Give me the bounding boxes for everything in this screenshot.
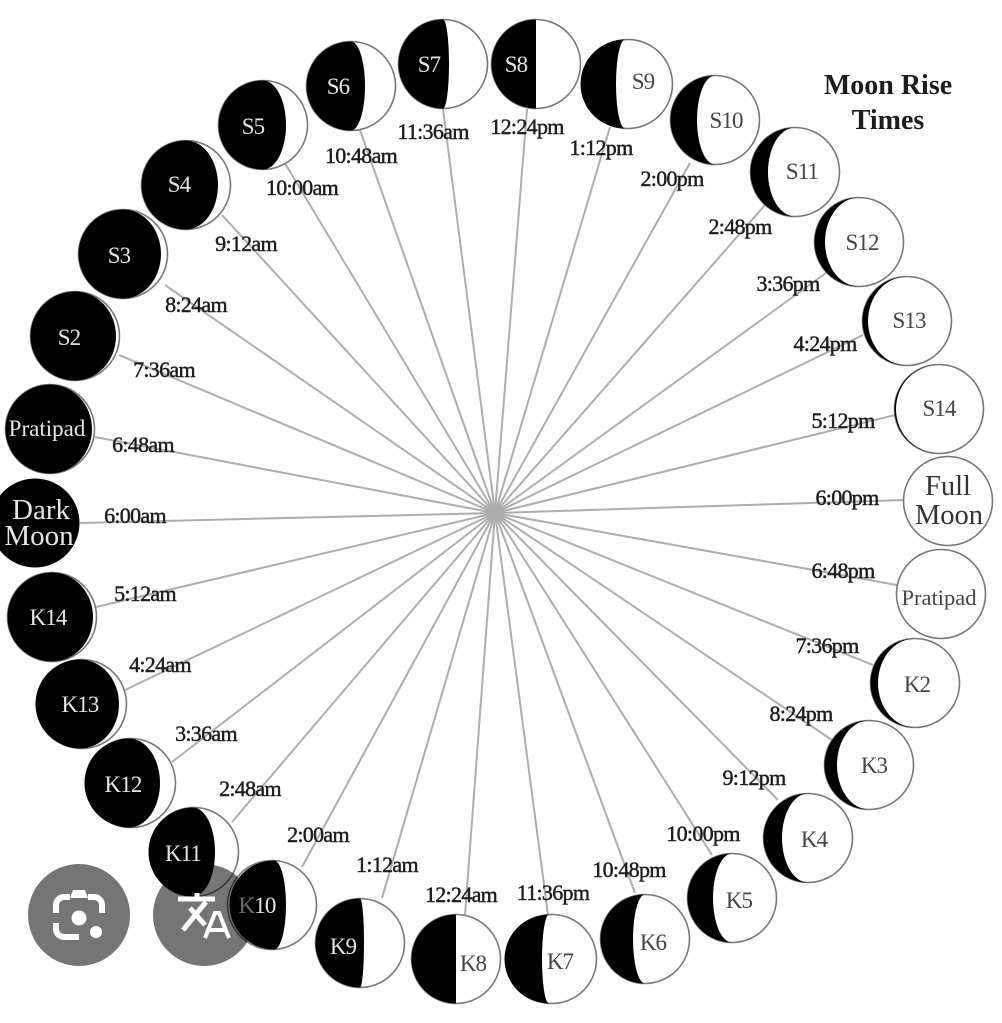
moon: S2: S2 — [58, 325, 81, 350]
moon: K5: K5 — [726, 888, 753, 913]
moon: S12: S12 — [845, 230, 879, 255]
moon: K14: K14 — [30, 605, 68, 630]
moon: S4: S4 — [168, 172, 192, 197]
title: Times — [852, 105, 924, 136]
time labels: 3:36am — [175, 721, 237, 746]
moon: Dark Moon — [0, 478, 80, 568]
moon: K12: K12 — [105, 772, 142, 797]
moon: K7 — [504, 914, 596, 1004]
time labels: 6:00pm — [815, 485, 879, 510]
moon: S14 — [894, 364, 984, 454]
moon: K8 — [412, 914, 500, 1004]
moon: K9 — [316, 898, 404, 988]
moon: S10: S10 — [709, 108, 743, 133]
time labels: 6:48pm — [811, 558, 875, 583]
time labels: 6:00am — [104, 503, 166, 528]
time labels: 3:36pm — [756, 271, 820, 296]
title — [824, 70, 952, 136]
icon: translate button — [153, 864, 255, 966]
moon: S3: S3 — [108, 243, 131, 268]
time labels: 8:24pm — [769, 701, 833, 726]
moon: S7 — [398, 20, 488, 108]
time labels: 11:36am — [397, 119, 469, 144]
moon: S6: S6 — [327, 74, 350, 99]
moon: K8: K8 — [460, 951, 487, 976]
moon: S5 — [218, 80, 308, 170]
moon: S9 — [580, 40, 672, 128]
time labels: 12:24pm — [490, 114, 564, 139]
time labels: 5:12pm — [811, 408, 875, 433]
moon: Pratipad waxing — [6, 384, 94, 474]
time labels: 2:00pm — [640, 166, 704, 191]
moon: K5 — [688, 854, 776, 942]
moon: K14 — [8, 572, 96, 662]
moon: S12 — [814, 198, 904, 286]
moon: S11: S11 — [786, 159, 819, 184]
moon: K2 — [870, 638, 960, 728]
time labels: 4:24pm — [793, 331, 857, 356]
moon: Pratipad waning — [896, 550, 986, 638]
moon: Full Moon — [904, 456, 992, 546]
time labels: 10:00pm — [666, 821, 740, 846]
time labels: 9:12am — [215, 231, 277, 256]
moon: K11: K11 — [165, 841, 201, 866]
moon: Pratipad waxing: Pratipad — [9, 416, 86, 441]
time labels: 1:12pm — [569, 135, 633, 160]
moon: S8 — [492, 20, 580, 108]
moon: K11 — [148, 808, 238, 896]
moon: S7: S7 — [418, 52, 441, 77]
moon: Full Moon: Moon — [915, 500, 983, 531]
time labels: 5:12am — [114, 581, 176, 606]
moon: S5: S5 — [242, 114, 265, 139]
moon: K12 — [84, 738, 176, 828]
moon: Dark Moon: Moon — [4, 520, 74, 552]
moon: S2 — [30, 292, 120, 380]
moon: K2: K2 — [904, 672, 931, 697]
moon: S13: S13 — [892, 308, 926, 333]
time labels: 1:12am — [356, 852, 418, 877]
moon: K13: K13 — [62, 692, 99, 717]
time labels: 4:24am — [129, 652, 191, 677]
time labels: 12:24am — [425, 882, 498, 907]
time labels: 10:00am — [266, 175, 339, 200]
moon: S11 — [750, 128, 840, 216]
title: Moon Rise — [824, 70, 952, 101]
time labels: 2:00am — [287, 822, 349, 847]
time labels: 10:48am — [325, 143, 398, 168]
moon: K4: K4 — [801, 827, 829, 852]
moon: S6 — [306, 42, 396, 130]
moon: K13 — [36, 660, 126, 748]
moon: S4 — [142, 140, 230, 230]
moon: S14: S14 — [922, 396, 957, 421]
moon: K7: K7 — [547, 949, 574, 974]
moon: S3 — [78, 210, 168, 298]
moon: Dark Moon: Dark — [12, 494, 70, 526]
time labels: 7:36pm — [795, 633, 859, 658]
moon: K6: K6 — [640, 930, 667, 955]
time labels: 10:48pm — [592, 857, 666, 882]
time labels — [104, 114, 879, 907]
moon: K3 — [824, 720, 914, 810]
moon: S9: S9 — [632, 69, 655, 94]
moon: S8: S8 — [505, 52, 528, 77]
moon: K3: K3 — [861, 753, 888, 778]
moon: K10 — [228, 860, 316, 950]
moon: Pratipad waning: Pratipad — [902, 585, 976, 610]
time labels: 7:36am — [133, 357, 195, 382]
time labels: 9:12pm — [722, 765, 786, 790]
time labels: 6:48am — [112, 432, 174, 457]
moon: Full Moon: Full — [925, 471, 971, 502]
moon: K10: K10 — [239, 893, 276, 918]
time labels: 2:48pm — [708, 214, 772, 239]
radial spokes — [80, 109, 904, 915]
moon: K9: K9 — [330, 934, 357, 959]
time labels: 11:36pm — [517, 880, 590, 905]
icon: camera lens button — [28, 864, 130, 966]
moon: S13 — [862, 276, 952, 366]
time labels: 2:48am — [219, 776, 281, 801]
moon: S10 — [670, 76, 760, 164]
moon: K4 — [764, 794, 852, 882]
moon: K6 — [600, 894, 690, 984]
time labels: 8:24am — [165, 292, 227, 317]
